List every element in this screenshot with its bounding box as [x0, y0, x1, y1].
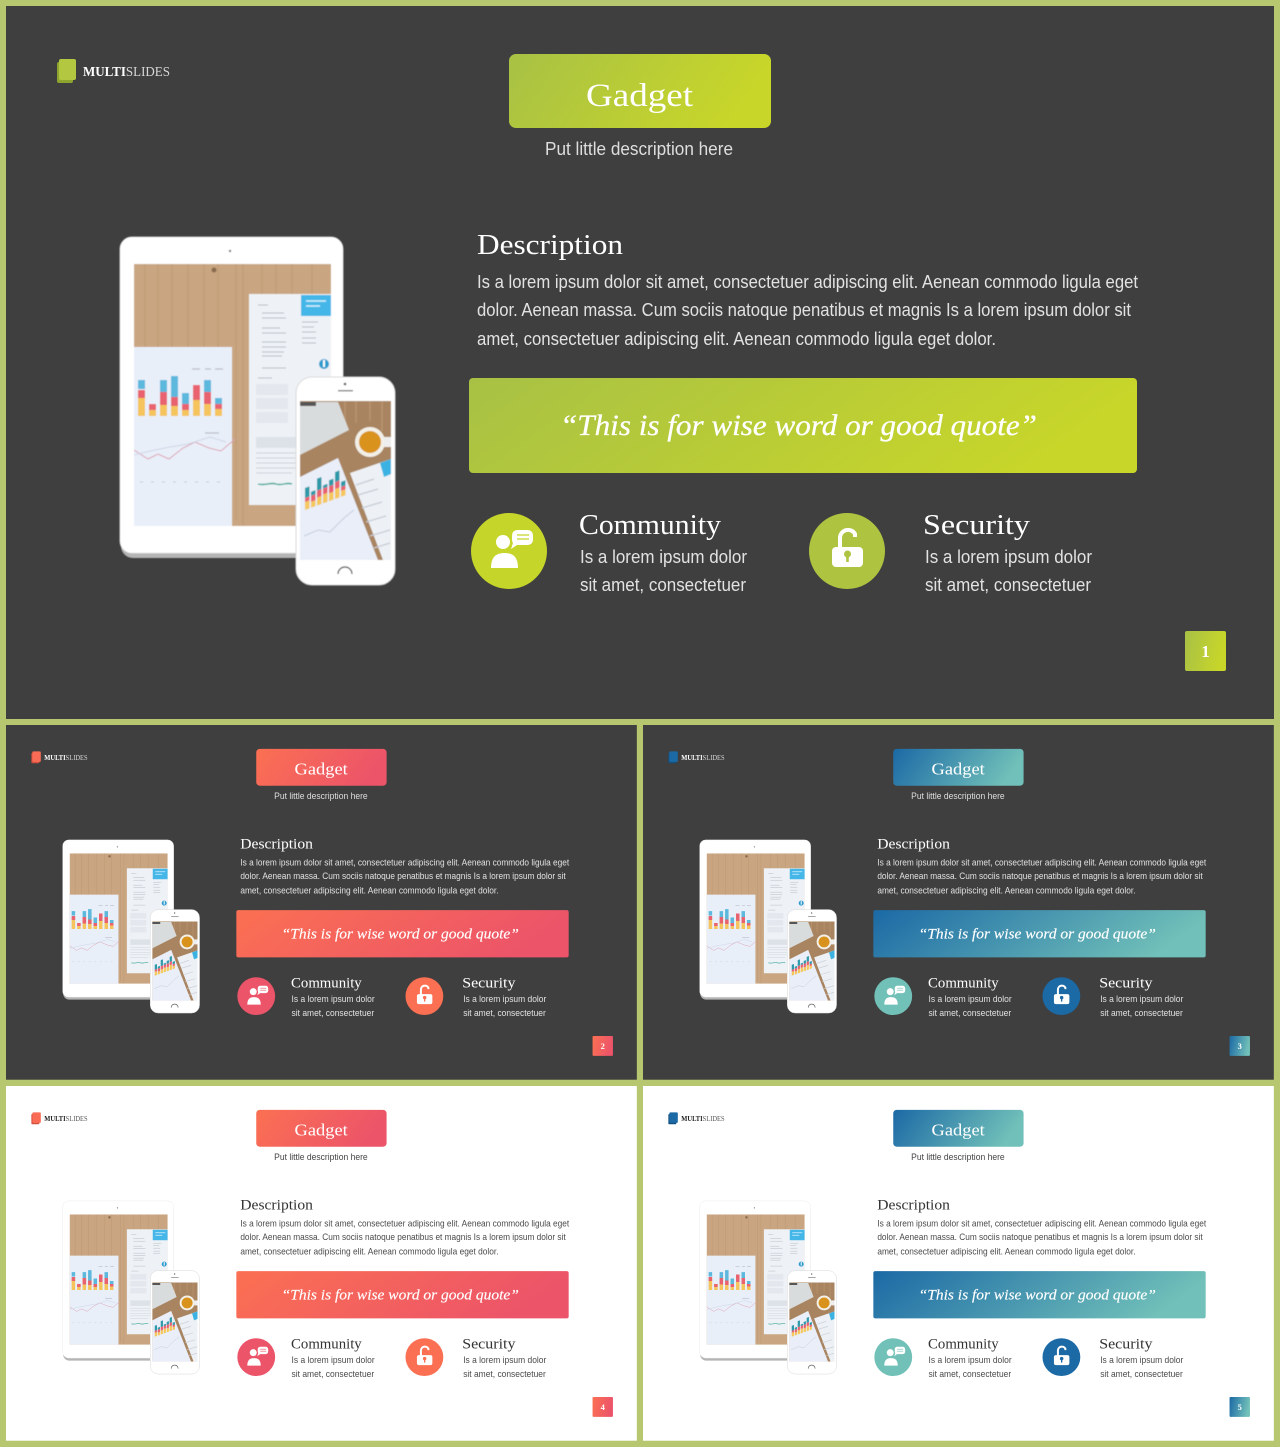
description paragraph: dolor. Aenean massa. Cum sociis natoque penatibus et magnis Is a lorem ipsum dolor sit	[877, 1232, 1203, 1242]
slide 3 background	[643, 725, 1274, 1080]
description paragraph	[240, 857, 570, 896]
subtitle: Put little description here	[545, 139, 733, 159]
community block: sit amet, consectetuer	[929, 1369, 1011, 1379]
community block: Is a lorem ipsum dolor	[292, 994, 375, 1004]
community block	[928, 1337, 1012, 1379]
description paragraph: Is a lorem ipsum dolor sit amet, consectetuer adipiscing elit. Aenean commodo ligula eget	[477, 272, 1138, 292]
description paragraph: amet, consectetuer adipiscing elit. Aenean commodo ligula eget dolor.	[877, 886, 1136, 896]
description paragraph	[477, 272, 1138, 349]
quote banner: “This is for wise word or good quote”	[282, 926, 519, 942]
quote banner: “This is for wise word or good quote”	[282, 1287, 519, 1303]
page number: 1	[1201, 642, 1210, 661]
community block: sit amet, consectetuer	[292, 1369, 374, 1379]
subtitle: Put little description here	[911, 791, 1005, 801]
logo	[668, 1112, 725, 1124]
security block	[1099, 1337, 1183, 1379]
logo: MULTISLIDES	[44, 754, 88, 762]
subtitle: Put little description here	[274, 1152, 368, 1162]
community icon	[237, 1338, 275, 1376]
description paragraph	[877, 857, 1207, 896]
security block: Security	[1099, 976, 1153, 992]
slide 5 background	[643, 1086, 1274, 1441]
description paragraph: Is a lorem ipsum dolor sit amet, consectetuer adipiscing elit. Aenean commodo ligula eget	[877, 1218, 1207, 1228]
description paragraph	[240, 1218, 570, 1257]
slide 4: red light slide	[6, 1086, 637, 1441]
security block: sit amet, consectetuer	[463, 1008, 546, 1018]
slide 4 background	[6, 1086, 637, 1441]
security block: Is a lorem ipsum dolor	[1100, 994, 1183, 1004]
slide 2 background	[6, 725, 637, 1080]
community block	[928, 976, 1012, 1018]
community block: Community	[928, 976, 1000, 992]
description paragraph: dolor. Aenean massa. Cum sociis natoque penatibus et magnis Is a lorem ipsum dolor sit	[240, 1232, 566, 1242]
quote banner	[469, 378, 1137, 473]
page number	[593, 1397, 613, 1417]
security block: Security	[462, 976, 516, 992]
title banner: Gadget	[295, 1121, 348, 1140]
device mockup: tablet and phone	[120, 237, 395, 585]
description heading: Description	[240, 836, 313, 852]
community block: Community	[291, 1337, 363, 1353]
description heading: Description	[477, 229, 624, 261]
security block: Is a lorem ipsum dolor	[463, 1355, 546, 1365]
quote banner: “This is for wise word or good quote”	[919, 926, 1156, 942]
security block	[462, 1337, 546, 1379]
security block: Security	[923, 509, 1031, 541]
community block: Is a lorem ipsum dolor	[292, 1355, 375, 1365]
page number: 5	[1238, 1402, 1242, 1412]
security block	[462, 976, 546, 1018]
title banner	[509, 54, 771, 128]
title banner	[893, 1110, 1024, 1147]
community block: sit amet, consectetuer	[580, 575, 746, 595]
community icon	[874, 1338, 912, 1376]
slide 5: blue light slide	[643, 1086, 1274, 1441]
security block: sit amet, consectetuer	[925, 575, 1091, 595]
description heading: Description	[240, 1197, 313, 1213]
description paragraph: Is a lorem ipsum dolor sit amet, consectetuer adipiscing elit. Aenean commodo ligula eget	[240, 1218, 570, 1228]
device mockup: tablet and phone	[63, 840, 200, 1013]
security block	[923, 509, 1092, 595]
description paragraph: Is a lorem ipsum dolor sit amet, consectetuer adipiscing elit. Aenean commodo ligula eget	[240, 857, 570, 867]
description paragraph: Is a lorem ipsum dolor sit amet, consectetuer adipiscing elit. Aenean commodo ligula eget	[877, 857, 1207, 867]
description paragraph: dolor. Aenean massa. Cum sociis natoque penatibus et magnis Is a lorem ipsum dolor sit	[240, 871, 566, 881]
title banner	[256, 1110, 387, 1147]
subtitle: Put little description here	[911, 1152, 1005, 1162]
community block: Community	[291, 976, 363, 992]
security icon	[405, 977, 443, 1015]
logo	[57, 59, 170, 83]
description paragraph: dolor. Aenean massa. Cum sociis natoque penatibus et magnis Is a lorem ipsum dolor sit	[477, 300, 1131, 320]
security icon	[809, 513, 885, 589]
logo: MULTISLIDES	[681, 1115, 725, 1123]
page number	[593, 1036, 613, 1056]
community icon	[874, 977, 912, 1015]
logo	[31, 751, 88, 763]
community block: Is a lorem ipsum dolor	[580, 547, 747, 567]
title banner: Gadget	[932, 760, 985, 779]
quote banner: “This is for wise word or good quote”	[919, 1287, 1156, 1303]
security block: Security	[1099, 1337, 1153, 1353]
page number: 4	[601, 1402, 606, 1412]
logo	[668, 751, 725, 763]
quote banner	[873, 910, 1206, 957]
security block: Is a lorem ipsum dolor	[463, 994, 546, 1004]
device mockup: tablet and phone	[700, 1201, 837, 1374]
community block: Is a lorem ipsum dolor	[929, 994, 1012, 1004]
community block: Community	[928, 1337, 1000, 1353]
quote banner	[873, 1271, 1206, 1318]
security block: sit amet, consectetuer	[463, 1369, 546, 1379]
device mockup: tablet and phone	[63, 1201, 200, 1374]
page number	[1230, 1397, 1250, 1417]
slide 3: blue dark slide	[643, 725, 1274, 1080]
subtitle: Put little description here	[274, 791, 368, 801]
device mockup: tablet and phone	[700, 840, 837, 1013]
description paragraph: amet, consectetuer adipiscing elit. Aenean commodo ligula eget dolor.	[240, 886, 499, 896]
description heading: Description	[877, 1197, 950, 1213]
title banner	[256, 749, 387, 786]
slide 2: red dark slide	[6, 725, 637, 1080]
description paragraph	[877, 1218, 1207, 1257]
community icon	[471, 513, 547, 589]
security block	[1099, 976, 1183, 1018]
security icon	[1042, 977, 1080, 1015]
quote banner: “This is for wise word or good quote”	[560, 409, 1037, 442]
community block	[579, 509, 747, 595]
page number: 2	[601, 1041, 605, 1051]
description paragraph: amet, consectetuer adipiscing elit. Aenean commodo ligula eget dolor.	[477, 329, 996, 349]
security icon	[405, 1338, 443, 1376]
community block: sit amet, consectetuer	[929, 1008, 1011, 1018]
title banner: Gadget	[932, 1121, 985, 1140]
community block: Community	[579, 509, 722, 541]
slide 1 background	[6, 6, 1274, 719]
community block	[291, 1337, 375, 1379]
description heading: Description	[877, 836, 950, 852]
title banner: Gadget	[586, 78, 693, 114]
description paragraph: amet, consectetuer adipiscing elit. Aenean commodo ligula eget dolor.	[877, 1247, 1136, 1257]
description paragraph: dolor. Aenean massa. Cum sociis natoque penatibus et magnis Is a lorem ipsum dolor sit	[877, 871, 1203, 881]
description paragraph: amet, consectetuer adipiscing elit. Aenean commodo ligula eget dolor.	[240, 1247, 499, 1257]
quote banner	[236, 910, 569, 957]
community icon	[237, 977, 275, 1015]
logo: MULTISLIDES	[681, 754, 725, 762]
security block: Is a lorem ipsum dolor	[1100, 1355, 1183, 1365]
security block: sit amet, consectetuer	[1100, 1369, 1183, 1379]
page number	[1230, 1036, 1250, 1056]
community block: sit amet, consectetuer	[292, 1008, 374, 1018]
security block: Security	[462, 1337, 516, 1353]
logo: MULTISLIDES	[83, 65, 170, 80]
community block	[291, 976, 375, 1018]
title banner: Gadget	[295, 760, 348, 779]
page number: 3	[1238, 1041, 1242, 1051]
security icon	[1042, 1338, 1080, 1376]
security block: Is a lorem ipsum dolor	[925, 547, 1092, 567]
logo: MULTISLIDES	[44, 1115, 88, 1123]
community block: Is a lorem ipsum dolor	[929, 1355, 1012, 1365]
page number	[1185, 631, 1226, 671]
slide 1: large green dark slide	[6, 6, 1274, 719]
logo	[31, 1112, 88, 1124]
quote banner	[236, 1271, 569, 1318]
security block: sit amet, consectetuer	[1100, 1008, 1183, 1018]
title banner	[893, 749, 1024, 786]
